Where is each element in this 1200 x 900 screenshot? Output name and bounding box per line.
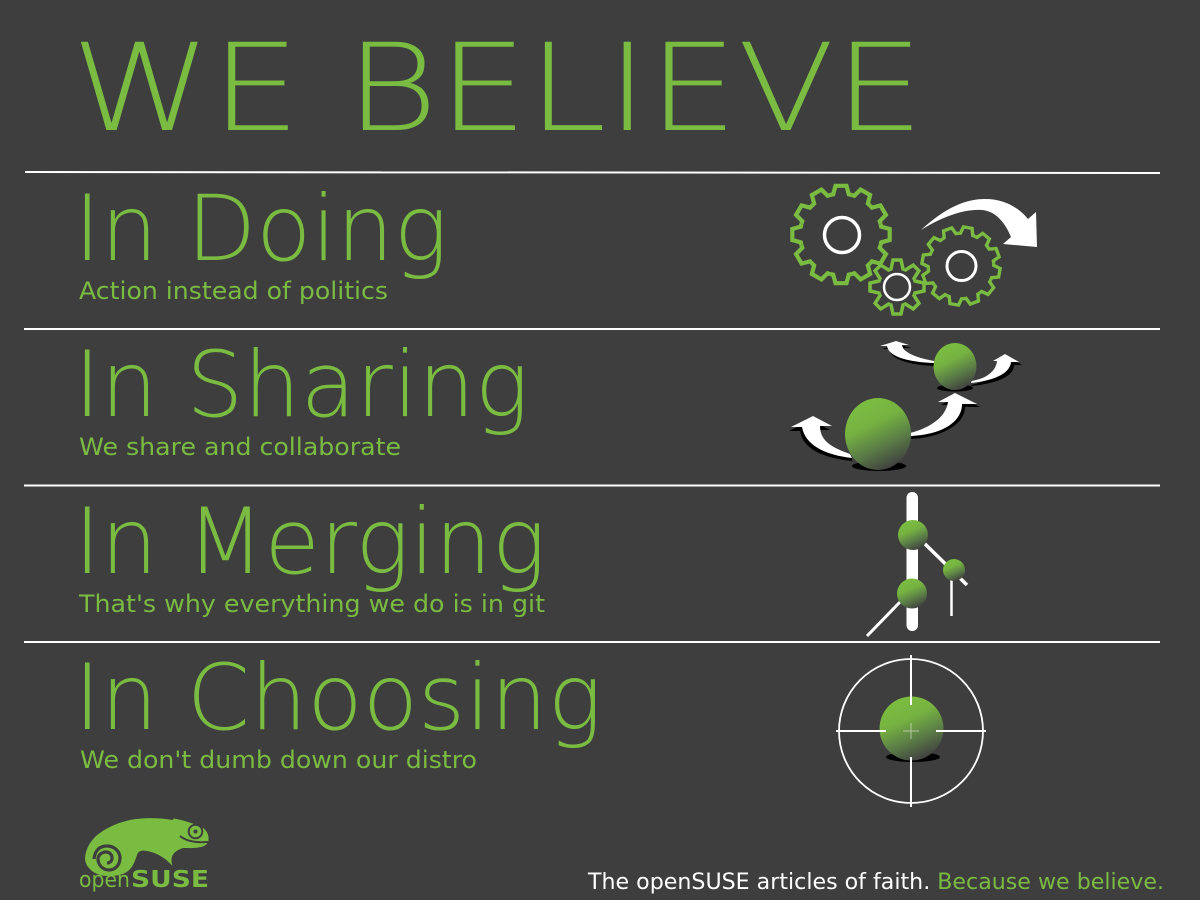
arrow: large right [910, 393, 977, 436]
side branches [867, 543, 967, 636]
main branch [906, 492, 918, 631]
node side [943, 559, 965, 581]
arrow: small right [971, 354, 1019, 383]
egg: small [934, 343, 976, 390]
icon: target [836, 655, 986, 807]
egg: large [845, 398, 911, 470]
shadow: small egg [937, 384, 973, 392]
subtitle: choosing: We don't dumb down our distro [80, 746, 477, 774]
target ball [880, 696, 944, 760]
icon: sharing eggs and arrows [789, 341, 1022, 471]
target shadow [886, 752, 940, 762]
heading: In Doing: In Doing [74, 177, 448, 282]
logo: chameleon [85, 818, 209, 876]
title: WE BELIEVE [71, 18, 924, 159]
icon: git branches [867, 492, 967, 636]
icon: large gear [792, 186, 890, 283]
subtitle: doing: Action instead of politics [79, 277, 388, 305]
icon: right gear [916, 221, 1006, 311]
icon: small gear [870, 260, 924, 314]
shadow: large egg [852, 461, 906, 471]
crosshair [836, 655, 986, 807]
arrow shadows [789, 344, 1022, 461]
node bottom [897, 578, 927, 608]
heading: In Sharing: In Sharing [74, 333, 529, 438]
heading: In Choosing: In Choosing [74, 646, 602, 751]
logo: wordmark [79, 865, 209, 893]
subtitle: merging: That's why everything we do is in git [78, 590, 545, 618]
subtitle: sharing: We share and collaborate [79, 433, 401, 461]
footer tagline: The openSUSE articles of faith. Because we believe. [587, 870, 1164, 895]
target ring [839, 659, 983, 803]
logo: openSUSE [79, 818, 209, 893]
node top [898, 520, 928, 550]
heading: In Merging: In Merging [74, 490, 546, 595]
icon: gears with arrow [792, 186, 1037, 314]
arrow: curved right [921, 199, 1037, 247]
arrow: small left [880, 341, 934, 363]
arrow: large left [791, 416, 852, 458]
logo: wordmark: open [79, 868, 130, 893]
logo: wordmark: SUSE [131, 865, 209, 893]
